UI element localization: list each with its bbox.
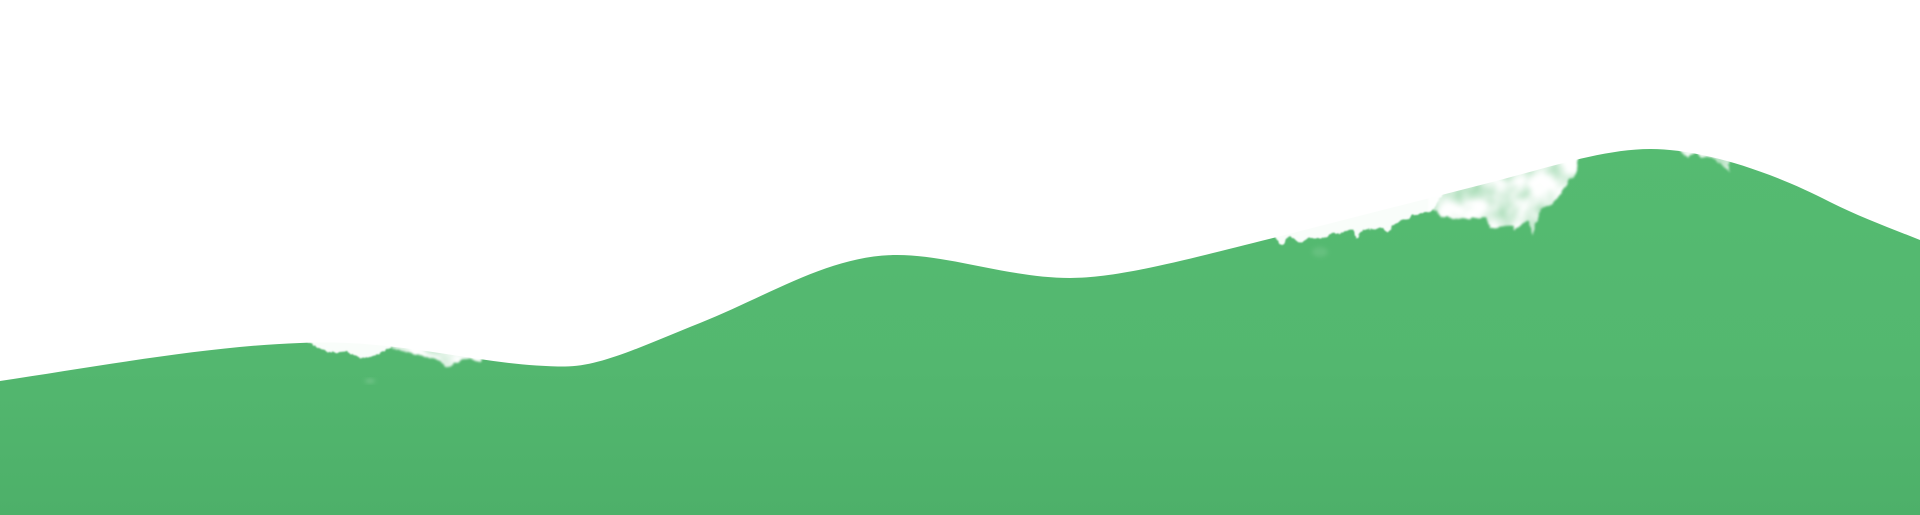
patch: large worn area, mottled side bbox=[1428, 150, 1577, 235]
patch: small worn area at the crest bbox=[1680, 142, 1730, 172]
patch: low left worn area, faded side bbox=[390, 335, 483, 367]
patch: faint speck below large area bbox=[1312, 247, 1328, 257]
patch: large worn area, solid side bbox=[1270, 160, 1445, 245]
green hill shape bbox=[0, 149, 1920, 515]
worn paint patches bbox=[308, 142, 1730, 383]
patch: faint speck bbox=[365, 379, 375, 383]
patch: low left worn area, solid side bbox=[308, 332, 395, 358]
